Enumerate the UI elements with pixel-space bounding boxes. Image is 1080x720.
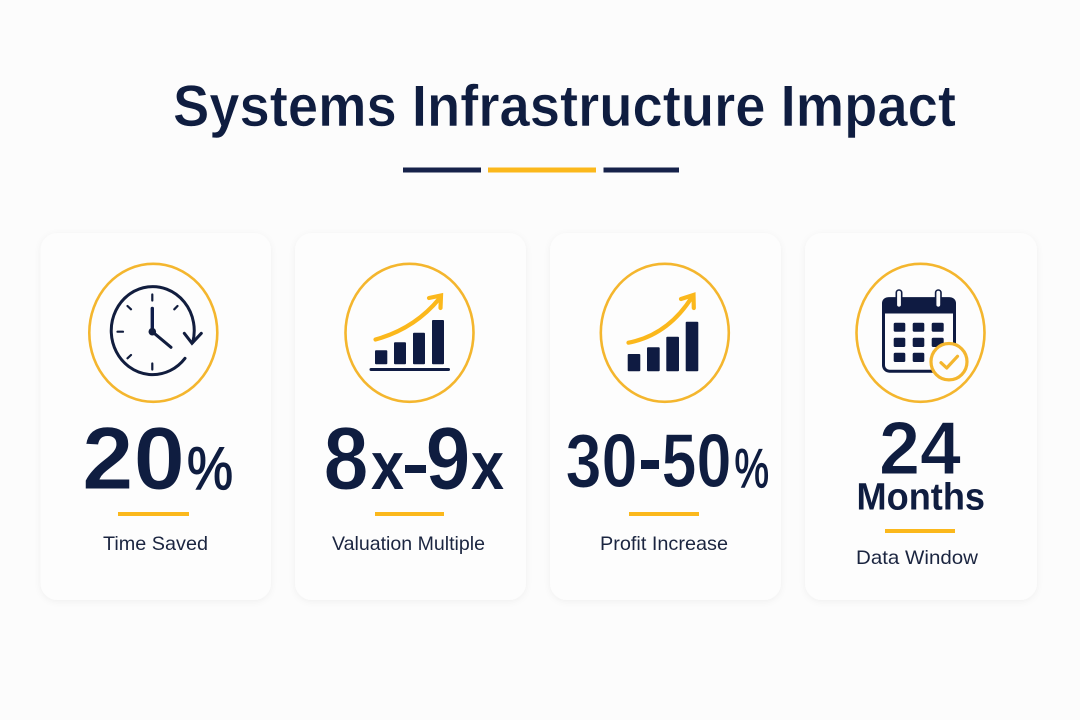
stat: 30-50%: 50	[662, 419, 732, 504]
stat: 8x-9x: 9	[426, 408, 470, 508]
stat: 20%: 20	[82, 408, 185, 508]
label: Profit Increase	[600, 533, 728, 555]
title: Systems Infrastructure Impact	[173, 74, 956, 139]
title divider	[403, 168, 679, 172]
stat: 8x-9x: 8	[324, 408, 368, 508]
panel: valuation multiple	[295, 233, 526, 600]
stat: 8x-9x	[324, 408, 504, 508]
label: Valuation Multiple	[332, 533, 485, 555]
accent line	[629, 512, 699, 516]
accent line	[118, 512, 189, 516]
stat: 30-50%: %	[734, 437, 769, 499]
stat: 30-50%: 30	[566, 419, 638, 504]
panel: profit increase	[550, 233, 781, 600]
accent line	[375, 512, 444, 516]
label: Data Window	[856, 547, 979, 569]
icon: calendar with check	[856, 264, 984, 402]
icon: clock	[89, 264, 217, 402]
stat: 8x-9x: x	[471, 428, 504, 504]
label: Time Saved	[103, 533, 208, 555]
stat: 24 Months: 24	[879, 406, 961, 490]
accent line	[885, 529, 955, 533]
panel: data window	[805, 233, 1037, 600]
stat: 8x-9x: x	[371, 428, 404, 504]
stat: 24 Months	[856, 406, 985, 518]
stat: 30-50%	[566, 419, 769, 504]
icon: bar chart with arrow	[346, 264, 474, 402]
icon: bar chart with arrow	[601, 264, 729, 402]
stat: 20%	[82, 408, 233, 508]
stat: 20%: %	[187, 435, 233, 502]
stat: 24 Months: Months	[856, 476, 985, 518]
panel: time saved	[40, 233, 271, 600]
